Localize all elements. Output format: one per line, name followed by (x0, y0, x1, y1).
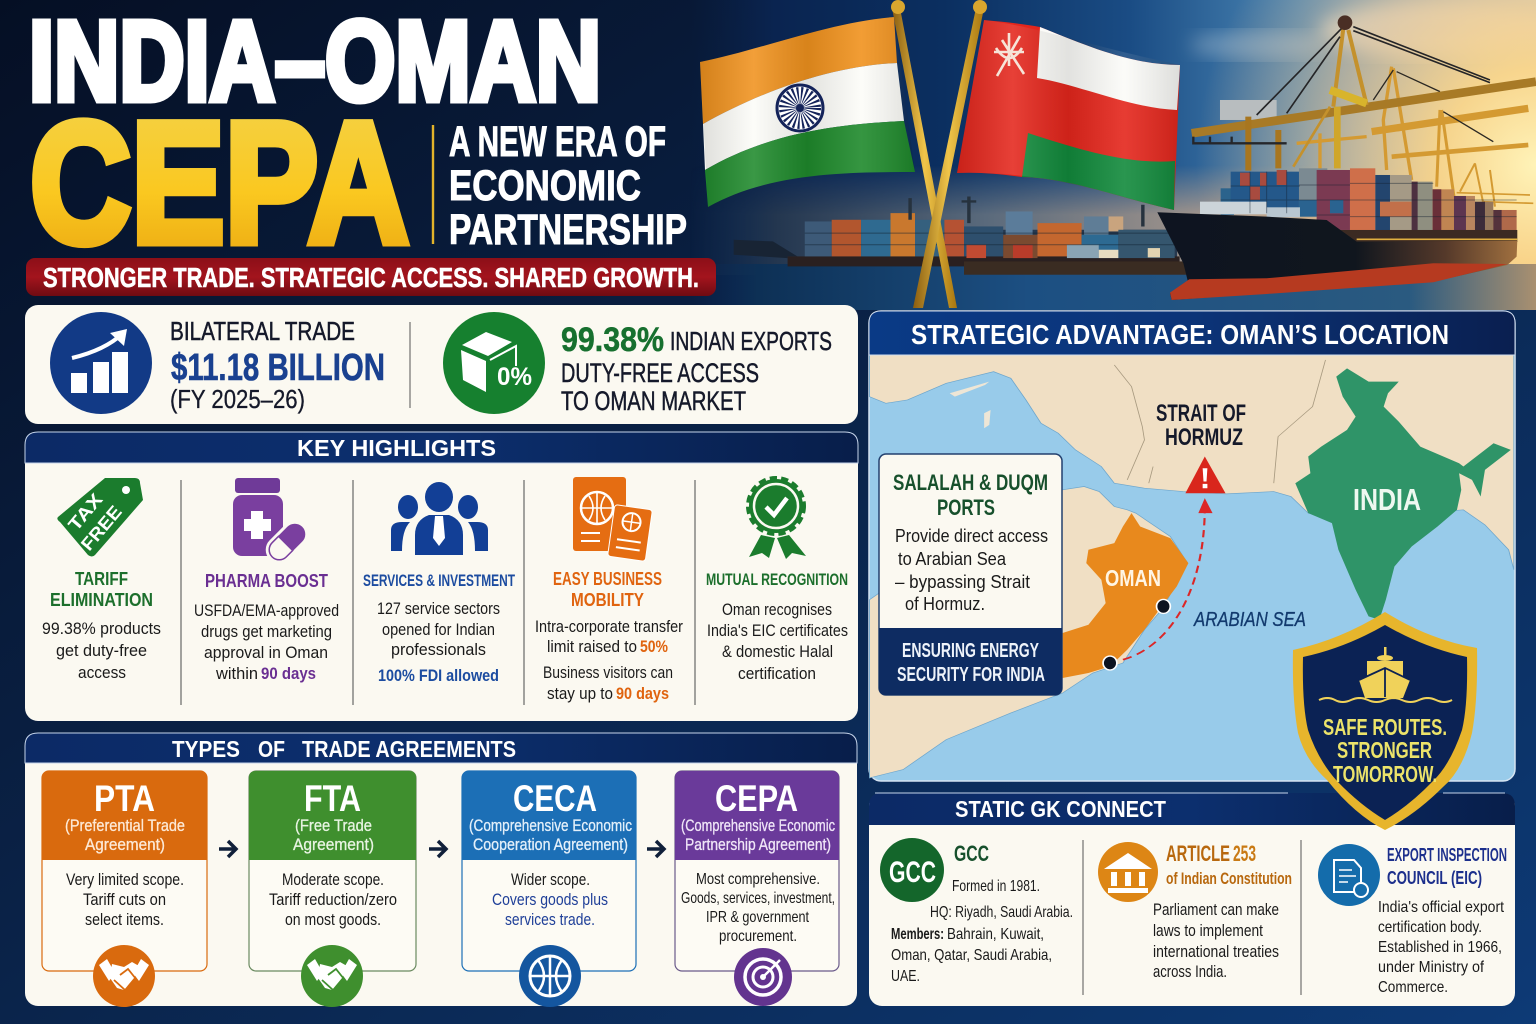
highlight: services and investment: SERVICES & INVESTMENT (363, 571, 515, 590)
fact: Export Inspection Council (1318, 844, 1507, 996)
card: CECA: Covers goods plus (492, 890, 608, 909)
fact: Article 253: across India. (1153, 962, 1227, 981)
fact: Export Inspection Council: COUNCIL (EIC) (1387, 868, 1482, 888)
subtitle: ECONOMIC (449, 162, 641, 210)
fact: Article 253: of Indian Constitution (1166, 869, 1292, 888)
Oman emblem (994, 33, 1024, 76)
fact: Article 253: laws to implement (1153, 921, 1263, 940)
port markers (1103, 599, 1170, 670)
icon: box with 0% (443, 312, 545, 414)
card: CEPA: CEPA (715, 778, 798, 819)
label: Strait of Hormuz: HORMUZ (1165, 424, 1243, 451)
highlight: pharma boost: drugs get marketing (201, 622, 332, 641)
card: FTA (249, 771, 416, 1007)
label: India: INDIA (1353, 482, 1421, 517)
card: FTA: Tariff reduction/zero (269, 890, 397, 909)
highlight: services and investment: 127 service sectors (377, 599, 500, 618)
panel: headline stats (25, 305, 858, 424)
Ashoka chakra (777, 85, 823, 131)
card: CECA: Wider scope. (511, 870, 590, 889)
highlight: pharma boost: within (215, 664, 258, 683)
highlight: easy business mobility: MOBILITY (571, 590, 644, 610)
Oman shape (1063, 513, 1188, 678)
label: Strait of Hormuz: STRAIT OF (1156, 400, 1246, 427)
route arrow (1123, 498, 1213, 660)
card: FTA: FTA (304, 778, 361, 819)
callout: Salalah and Duqm ports: ENSURING ENERGY (902, 640, 1039, 662)
highlight: tariff elimination: ELIMINATION (50, 590, 153, 610)
highlight: tariff elimination: access (78, 663, 126, 682)
highlight: mutual recognition: & domestic Halal (722, 642, 833, 661)
heading: types of trade agreements: TYPES (172, 736, 240, 762)
highlight: services and investment: 100% FDI allowed (378, 666, 499, 685)
fact: GCC (880, 838, 1073, 985)
card: PTA: select items. (85, 910, 164, 929)
icon: business people (391, 482, 488, 555)
highlight: tariff elimination: 99.38% products (42, 619, 161, 638)
highlight: pharma boost (194, 478, 339, 683)
arrow (219, 841, 236, 857)
arrow (647, 841, 664, 857)
fact: Article 253: Parliament can make (1153, 900, 1279, 919)
highlight: mutual recognition: certification (738, 664, 816, 683)
panel: strategic advantage map (869, 311, 1515, 781)
label: Oman: OMAN (1105, 565, 1161, 591)
shield badge: safe routes: STRONGER (1337, 737, 1432, 763)
highlight: easy business mobility: limit raised to (547, 637, 637, 656)
subtitle (449, 118, 687, 254)
card: PTA (42, 771, 207, 1007)
heading: types of trade agreements: TRADE AGREEMENTS (302, 736, 516, 762)
heading: types of trade agreements (172, 736, 516, 762)
panel: static GK connect (869, 793, 1515, 1006)
highlight: easy business mobility: 50% (640, 637, 668, 656)
heading: static GK connect: STATIC GK CONNECT (955, 796, 1166, 822)
fact: GCC: Oman, Qatar, Saudi Arabia, (891, 947, 1052, 964)
fact: Article 253: ARTICLE (1166, 841, 1230, 866)
callout: Salalah and Duqm ports: Provide direct access (895, 526, 1048, 546)
highlight: services and investment: professionals (391, 640, 486, 659)
icon: award rosette (749, 479, 806, 559)
shield badge: safe routes: SAFE ROUTES. (1323, 714, 1447, 740)
highlight: pharma boost: approval in Oman (204, 643, 328, 662)
fact: Export Inspection Council: certification body. (1378, 919, 1482, 936)
highlight: pharma boost: PHARMA BOOST (205, 571, 328, 591)
arrow (429, 841, 446, 857)
highlight: easy business mobility: Business visitors can (543, 663, 673, 682)
label: Strait of Hormuz (1156, 400, 1246, 451)
fact: Article 253 (1098, 841, 1292, 981)
highlight: easy business mobility: Intra-corporate transfer (535, 617, 683, 636)
fact: Export Inspection Council: Established in 1966, (1378, 939, 1502, 956)
fact: Export Inspection Council: Commerce. (1378, 979, 1448, 996)
icon: target (734, 948, 792, 1006)
callout: Salalah and Duqm ports (879, 454, 1062, 695)
icon: tax free tag: FREE (77, 502, 126, 554)
shield badge: safe routes (1293, 612, 1477, 830)
card: CECA: CECA (513, 778, 597, 819)
flags on crossed gold poles (700, 0, 1180, 308)
fact: GCC: UAE. (891, 968, 920, 985)
heading: types of trade agreements: OF (258, 736, 285, 762)
highlight: pharma boost: USFDA/EMA-approved (194, 601, 339, 620)
red tagline banner (26, 258, 716, 296)
heading: strategic advantage: STRATEGIC ADVANTAGE: OMAN’S LOCATION (911, 319, 1449, 350)
highlight: mutual recognition: Oman recognises (722, 600, 832, 619)
fact: GCC: HQ: Riyadh, Saudi Arabia. (930, 904, 1073, 921)
highlight: tariff elimination (42, 478, 161, 682)
red tagline banner: STRONGER TRADE. STRATEGIC ACCESS. SHARED GROWTH. (43, 262, 699, 293)
fact: Article 253: international treaties (1153, 942, 1279, 961)
stat: duty-free exports: INDIAN EXPORTS (670, 326, 832, 356)
card: CECA (462, 771, 636, 1007)
flag: Oman (957, 20, 1180, 210)
icon: certificate (1318, 844, 1380, 906)
main crane (1192, 15, 1536, 171)
highlight: services and investment: opened for Indian (382, 620, 495, 639)
fact: Article 253: 253 (1233, 841, 1256, 866)
icon: handshake (93, 945, 155, 1007)
hero scene: port, ship and cranes (690, 0, 1536, 310)
card: FTA: Moderate scope. (282, 870, 384, 889)
card: PTA: (Preferential Trade (65, 816, 185, 835)
highlight: services and investment (363, 482, 515, 685)
card: CECA: Cooperation Agreement) (473, 835, 628, 854)
icon: handshake (301, 945, 363, 1007)
icon: GCC badge: GCC (889, 856, 936, 889)
icon: passports (573, 477, 652, 561)
highlight: tariff elimination: TARIFF (75, 569, 128, 589)
fact: Export Inspection Council: India's official export (1378, 899, 1504, 916)
callout: Salalah and Duqm ports: of Hormuz. (905, 594, 985, 614)
card: FTA: (Free Trade (295, 816, 372, 835)
highlight: mutual recognition (706, 479, 848, 683)
stat: bilateral trade: BILATERAL TRADE (170, 316, 355, 346)
callout: Salalah and Duqm ports: PORTS (937, 495, 995, 520)
stat: duty-free exports (561, 321, 832, 416)
highlight: easy business mobility (535, 477, 683, 703)
card: FTA: on most goods. (285, 910, 381, 929)
highlight: pharma boost: 90 days (261, 664, 316, 683)
icon: ship (1319, 647, 1452, 702)
card: PTA: Agreement) (85, 835, 165, 854)
stat: duty-free exports: 99.38% (561, 321, 664, 359)
icon: medicine bottle and capsule (233, 478, 312, 567)
card: CEPA (675, 771, 839, 1006)
panel: key highlights (25, 432, 858, 721)
India shape (1295, 368, 1511, 620)
callout: Salalah and Duqm ports: – bypassing Strait (895, 572, 1030, 592)
stat: duty-free exports: DUTY-FREE ACCESS (561, 358, 759, 388)
card: CEPA: procurement. (719, 928, 797, 945)
fact: GCC: GCC (954, 841, 989, 866)
card: CEPA: Most comprehensive. (696, 871, 820, 888)
highlight: mutual recognition: MUTUAL RECOGNITION (706, 570, 848, 589)
icon: tax free tag (57, 478, 143, 556)
port containers (734, 196, 1189, 275)
icon: tax free tag: TAX (64, 490, 107, 535)
card: CECA: (Comprehensive Economic (469, 816, 632, 835)
flag poles (892, 8, 957, 308)
subtitle: A NEW ERA OF (449, 118, 666, 166)
stat: duty-free exports: TO OMAN MARKET (561, 386, 746, 416)
fact: GCC: Members: (891, 926, 944, 943)
fact: Export Inspection Council: under Ministry of (1378, 959, 1484, 976)
fact: GCC: Formed in 1981. (952, 878, 1040, 895)
highlight: easy business mobility: EASY BUSINESS (553, 569, 662, 589)
card: CEPA: Goods, services, investment, (681, 890, 835, 907)
card: PTA: Tariff cuts on (83, 890, 166, 909)
stat: bilateral trade: (FY 2025–26) (170, 384, 305, 414)
subtitle: PARTNERSHIP (449, 206, 687, 254)
map header (869, 311, 1515, 355)
ship hull (1157, 212, 1517, 300)
heading: key highlights: KEY HIGHLIGHTS (297, 435, 496, 461)
title line: India-Oman: INDIA–OMAN (29, 0, 601, 124)
callout: Salalah and Duqm ports: SALALAH & DUQM (893, 470, 1048, 495)
panel: types of trade agreements (25, 733, 857, 1007)
label: Arabian Sea: ARABIAN SEA (1193, 609, 1306, 631)
icon: GCC badge (880, 838, 944, 902)
card: CEPA: Partnership Agreement) (685, 835, 831, 854)
flag: India (700, 17, 915, 207)
card: CEPA: IPR & government (706, 909, 809, 926)
highlight: easy business mobility: stay up to (547, 684, 613, 703)
stat: bilateral trade: $11.18 BILLION (171, 347, 385, 389)
callout: Salalah and Duqm ports: to Arabian Sea (898, 549, 1007, 569)
card: PTA: Very limited scope. (66, 870, 184, 889)
fact: GCC: Bahrain, Kuwait, (947, 926, 1044, 943)
card: PTA: PTA (94, 778, 155, 819)
strait warning icon (1185, 457, 1225, 493)
icon: parliament building (1098, 842, 1158, 902)
far cranes (1297, 67, 1533, 207)
icon: box with 0%: 0% (497, 363, 532, 391)
title (29, 0, 601, 279)
icon: rising bar chart (50, 312, 152, 414)
highlight: mutual recognition: India's EIC certificates (707, 621, 848, 640)
icon: globe (519, 945, 581, 1007)
card: CECA: services trade. (505, 910, 595, 929)
highlight: easy business mobility: 90 days (616, 684, 669, 703)
stat: bilateral trade (170, 316, 385, 414)
ship container stacks (1200, 168, 1517, 242)
card: CEPA: (Comprehensive Economic (681, 816, 835, 835)
callout: Salalah and Duqm ports: SECURITY FOR INDIA (897, 664, 1045, 686)
title line: CEPA: CEPA (30, 87, 409, 279)
gold divider (432, 125, 434, 244)
map (869, 355, 1514, 778)
shield badge: safe routes: TOMORROW. (1333, 761, 1437, 787)
card: FTA: Agreement) (293, 835, 374, 854)
highlight: tariff elimination: get duty-free (56, 641, 147, 660)
